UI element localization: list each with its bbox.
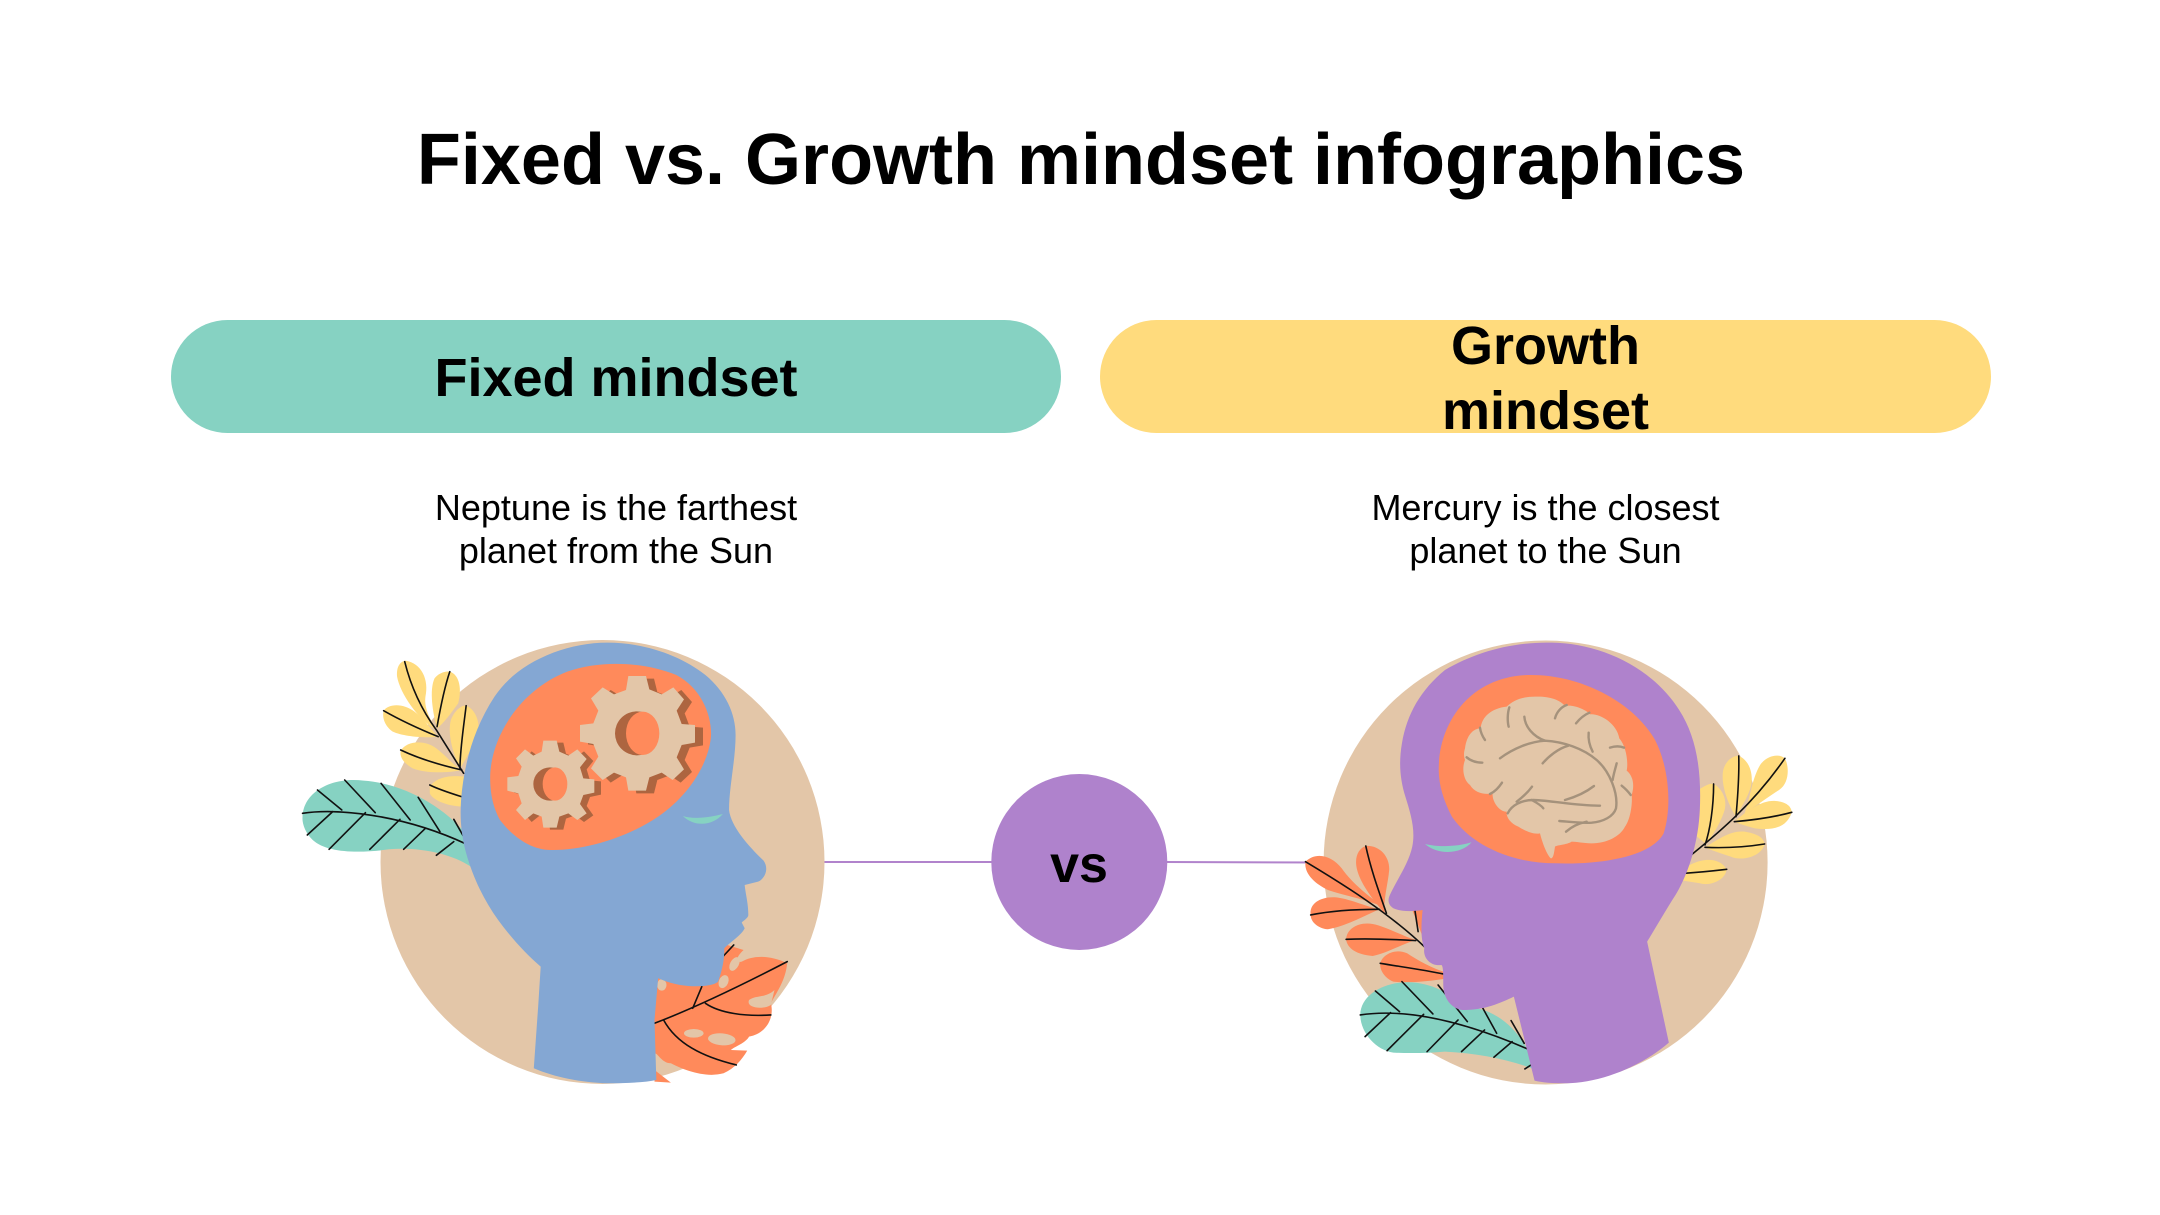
text block: growth mindset description xyxy=(1371,487,1720,571)
icon: orange monstera leaf xyxy=(644,945,787,1083)
brain area xyxy=(490,664,711,850)
icon: yellow leaves xyxy=(383,661,479,807)
icon: orange leaves xyxy=(1305,846,1448,982)
small gear xyxy=(507,741,601,830)
icon: teal leaf xyxy=(1360,982,1536,1070)
icon: gears xyxy=(507,676,703,830)
icon: blue head silhouette xyxy=(461,643,766,1083)
heading: growth mindset: mindset xyxy=(1442,381,1649,441)
text block: fixed mindset description xyxy=(435,487,797,571)
background circle xyxy=(1324,640,1768,1084)
title: Fixed vs. Growth mindset infographics xyxy=(417,120,1745,200)
text block: fixed mindset description: Neptune is the farthest xyxy=(435,487,797,528)
vs label: vs xyxy=(1050,836,1108,894)
leaves and head, left xyxy=(302,643,787,1083)
icon: brain xyxy=(1463,697,1633,858)
illustration: growth mindset head xyxy=(1305,640,1792,1084)
leaves and head, right xyxy=(1305,643,1792,1083)
icon: closed eye xyxy=(683,814,723,824)
heading: growth mindset: Growth xyxy=(1451,316,1640,376)
connector line left xyxy=(822,861,995,863)
icon: teal leaf xyxy=(302,780,471,867)
text block: growth mindset description: Mercury is the closest xyxy=(1371,487,1720,528)
text block: fixed mindset description: planet from the Sun xyxy=(459,530,773,571)
icon: closed eye xyxy=(1425,842,1471,852)
background circle xyxy=(380,640,824,1084)
icon: yellow leaves xyxy=(1679,756,1792,884)
large gear xyxy=(580,676,703,793)
panel: growth mindset pill xyxy=(1100,320,1991,433)
icon: purple head silhouette xyxy=(1389,643,1700,1083)
vs badge xyxy=(991,774,1167,950)
panel: fixed mindset pill xyxy=(171,320,1061,433)
heading: fixed mindset: Fixed mindset xyxy=(434,348,798,408)
heading: growth mindset xyxy=(1442,316,1649,441)
illustration: fixed mindset head xyxy=(302,640,824,1084)
connector line right xyxy=(1165,861,1325,864)
text block: growth mindset description: planet to the Sun xyxy=(1409,530,1682,571)
brain area xyxy=(1439,675,1668,864)
